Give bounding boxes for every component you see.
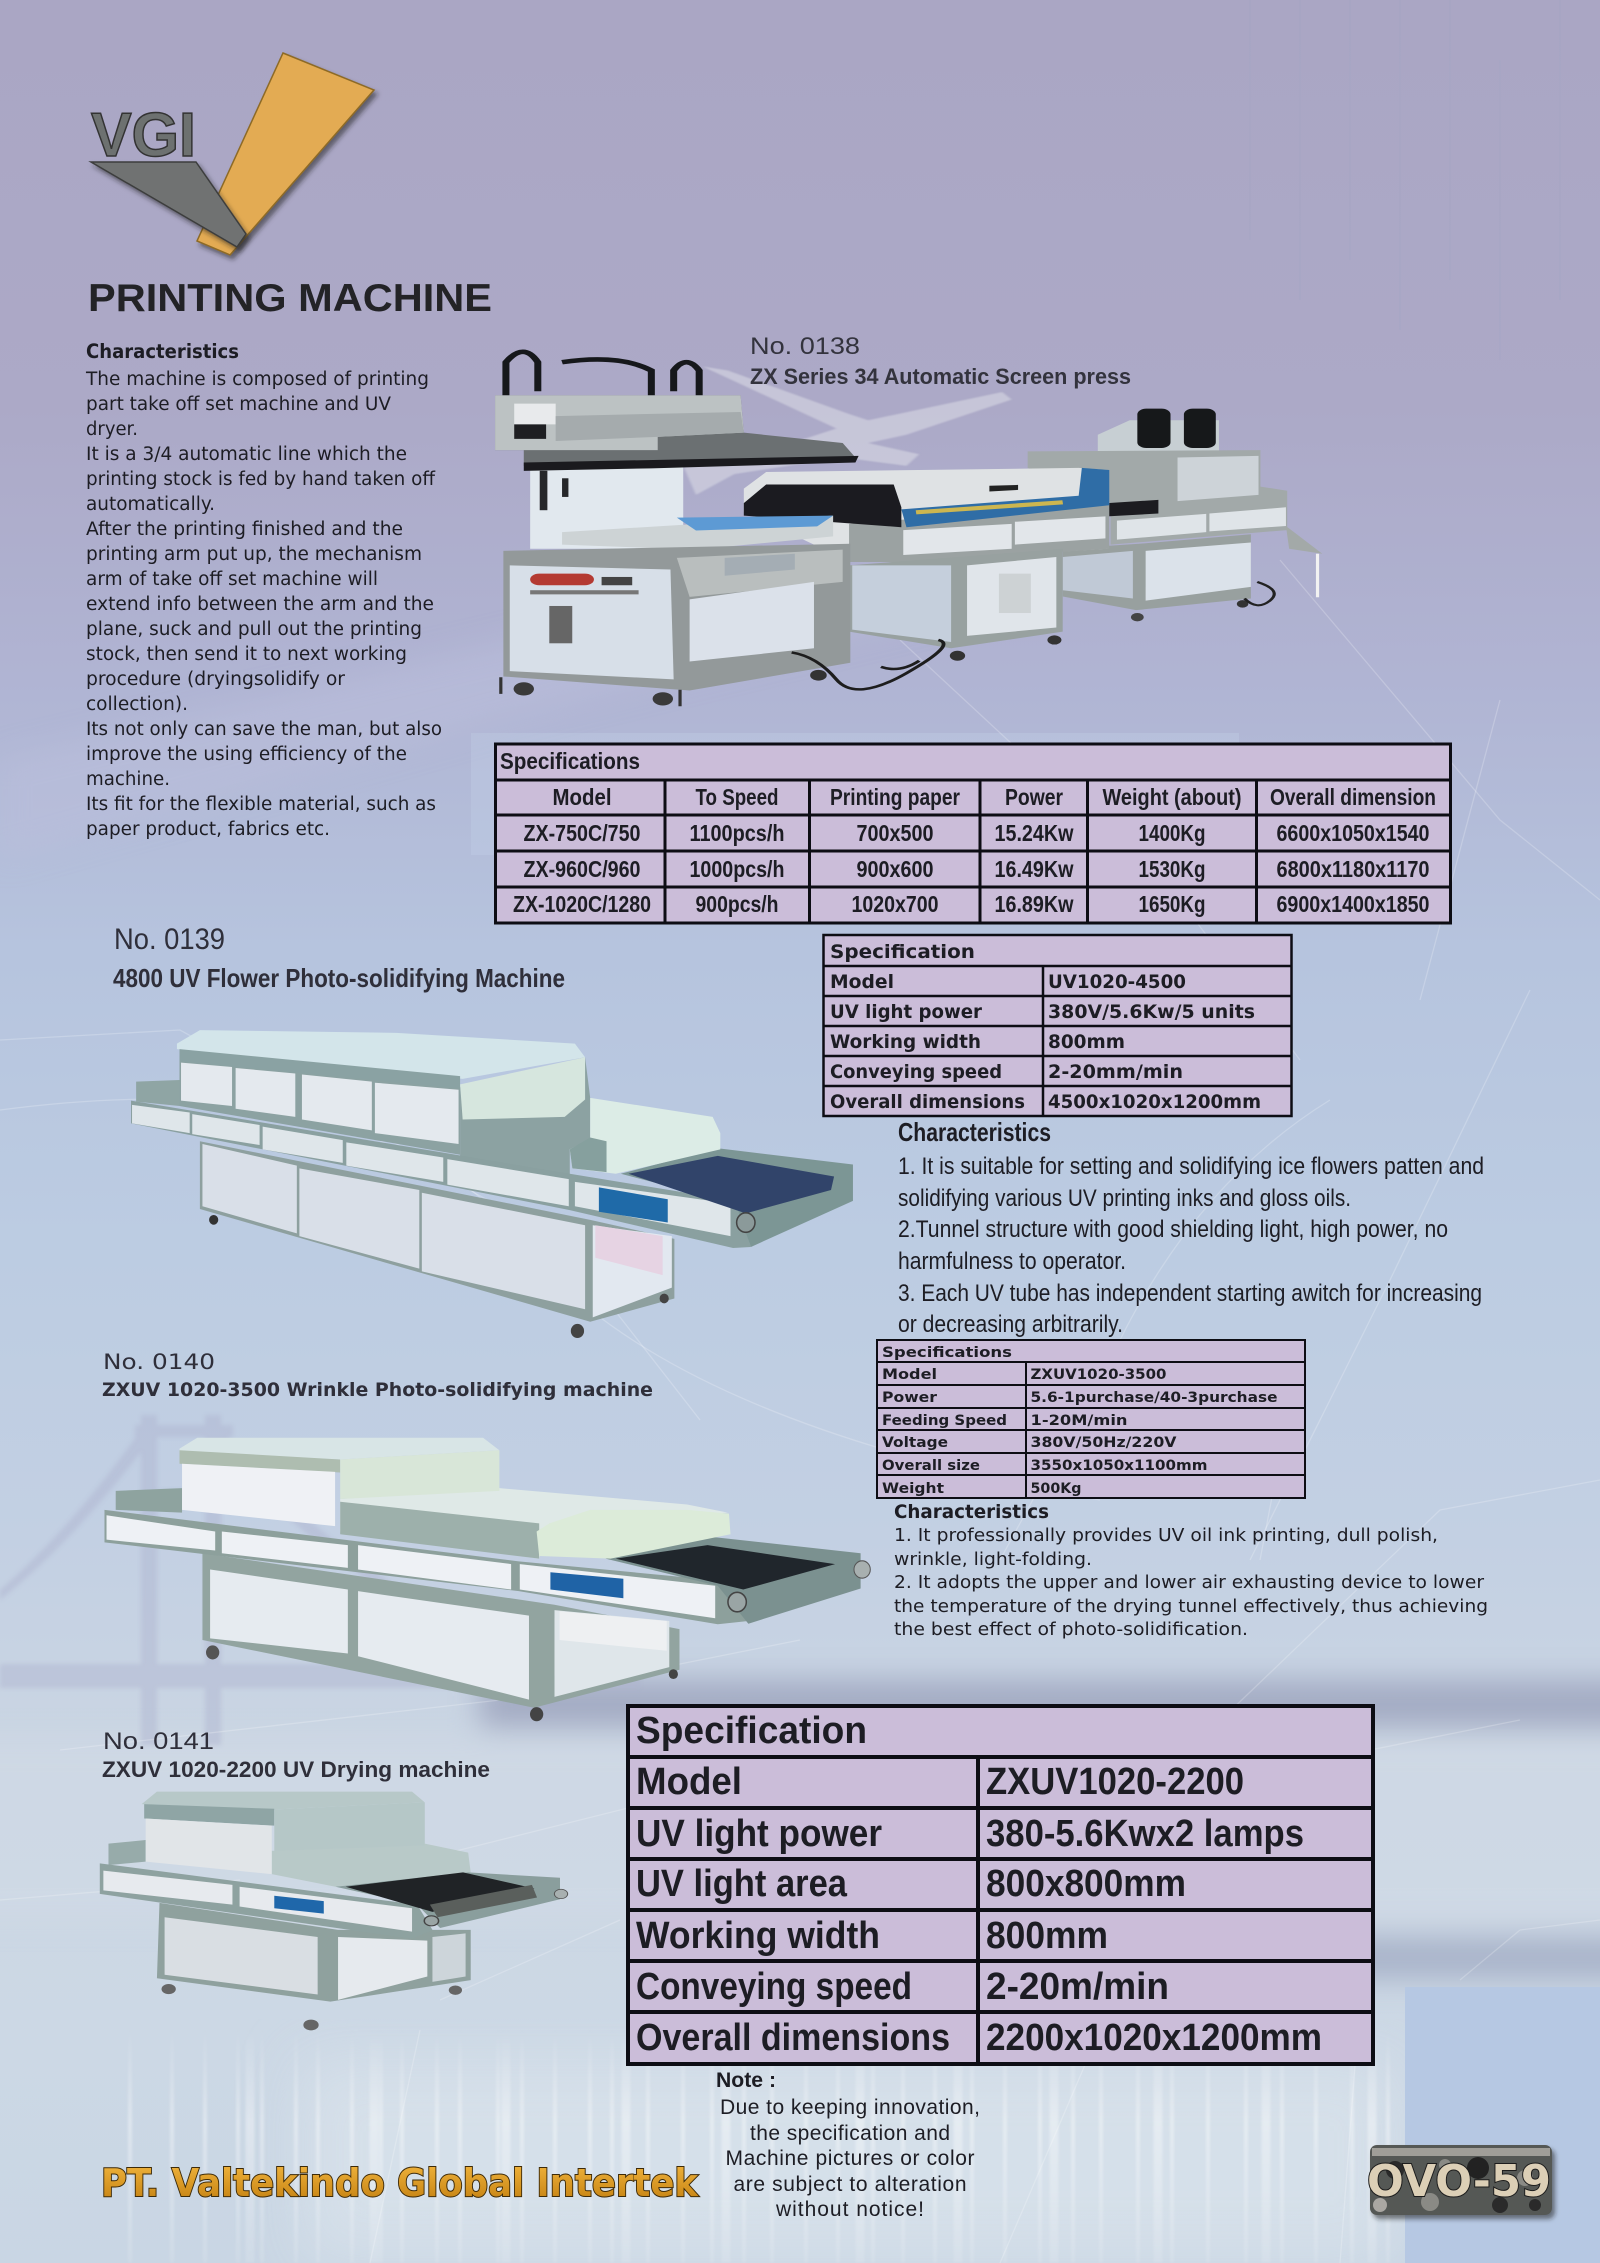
table: ZX series specifications: Model	[552, 784, 612, 810]
tunnel roof and drawers	[136, 1030, 590, 1176]
text block: note: the specification and	[750, 2122, 950, 2145]
table: ZX series specifications: Specifications	[500, 748, 640, 774]
press column and print table	[530, 449, 833, 550]
table: ZXUV1020-2200 specification: Overall dimensions	[636, 2017, 950, 2059]
text block: characteristics intro: paper product, fabrics etc.	[86, 819, 330, 840]
text block: 0140 characteristics: wrinkle, light-folding.	[894, 1550, 1092, 1570]
table: UV1020-4500 specification: 4500x1020x1200mm	[1048, 1091, 1261, 1113]
table: ZXUV1020-2200 specification: Conveying speed	[636, 1966, 912, 2008]
tunnel top	[116, 1438, 728, 1559]
text block: characteristics intro: part take off set machine and UV	[86, 394, 391, 415]
table: UV1020-4500 specification: 800mm	[1048, 1031, 1125, 1053]
table: UV1020-4500 specification: 2-20mm/min	[1048, 1061, 1183, 1083]
side rail	[100, 1863, 432, 1939]
table: ZXUV1020-3500 specifications: Model	[882, 1367, 937, 1383]
machine 0138 image: automatic screen press	[495, 352, 1322, 706]
table: ZXUV1020-3500 specifications: Specifications	[882, 1345, 1012, 1361]
machine heading: No. 0139	[113, 923, 565, 993]
airplane behind machine 0138	[683, 366, 1012, 495]
text block: characteristics intro: extend info between the arm and the	[86, 594, 434, 615]
table: ZXUV1020-3500 specifications: 500Kg	[1030, 1481, 1082, 1497]
machine name: ZXUV 1020-2200 UV Drying machine	[102, 1757, 490, 1782]
long side rail	[104, 1510, 748, 1624]
conveyor belt	[336, 1872, 568, 1928]
heading: characteristics: Characteristics	[86, 340, 239, 363]
table: ZX series specifications: Printing paper	[830, 784, 960, 810]
cabinet below tunnel	[202, 1553, 679, 1721]
text block: characteristics intro: The machine is composed of printing	[85, 369, 429, 390]
table: ZXUV1020-2200 specification: 800mm	[986, 1915, 1108, 1957]
table: UV1020-4500 specification: Model	[830, 971, 894, 993]
table: ZXUV1020-3500 specifications: Voltage	[882, 1435, 948, 1451]
text block: characteristics intro: automatically.	[86, 494, 215, 515]
table: ZXUV1020-2200 specification: Working width	[636, 1915, 880, 1957]
press base cabinet	[501, 544, 944, 706]
table: ZX series specifications: 6900x1400x1850	[1276, 891, 1430, 917]
machine name: ZXUV 1020-3500 Wrinkle Photo-solidifying machine	[102, 1379, 653, 1401]
text block: 0139 characteristics: 3. Each UV tube has independent starting awitch for increasing	[898, 1280, 1482, 1307]
text block: note: Due to keeping innovation,	[720, 2096, 980, 2119]
text block: characteristics intro: dryer.	[86, 419, 138, 440]
machine heading: No. 0140: No. 0140	[103, 1350, 215, 1374]
title: PRINTING MACHINE	[88, 277, 492, 320]
table: ZX series specifications: 16.89Kw	[994, 891, 1074, 917]
text block: 0139 characteristics: harmfulness to operator.	[898, 1248, 1126, 1275]
table: ZX series specifications: To Speed	[696, 784, 778, 810]
text block: note: without notice!	[775, 2198, 924, 2221]
badge label: OVO-59	[1367, 2156, 1551, 2207]
text block: characteristics intro: machine.	[86, 769, 170, 790]
conveyor belt	[606, 1537, 870, 1624]
table: ZXUV1020-3500 specifications: ZXUV1020-3500	[1030, 1367, 1166, 1383]
table: ZXUV1020-3500 specifications: Feeding Speed	[882, 1413, 1007, 1429]
machine 0139 image: UV flower tunnel	[131, 1030, 853, 1338]
cabinet below tunnel	[200, 1141, 674, 1338]
table: UV1020-4500 specification: UV light power	[830, 1001, 983, 1023]
table: ZX series specifications: 1000pcs/h	[690, 856, 784, 882]
table: ZX series specifications: 1100pcs/h	[690, 820, 784, 846]
badge: OVO-59 stone plate	[1367, 2145, 1552, 2215]
text block: characteristics intro: After the printing finished and the	[86, 519, 403, 540]
text block: characteristics intro: stock, then send it to next working	[86, 644, 407, 665]
table: ZXUV1020-2200 specification: 380-5.6Kwx2 lamps	[986, 1813, 1304, 1855]
table: ZXUV1020-2200 specification: Model	[636, 1761, 742, 1803]
table: ZX series specifications: ZX-960C/960	[524, 856, 640, 882]
text block: characteristics intro: It is a 3/4 automatic line which the	[86, 444, 407, 465]
table: ZXUV1020-2200 specification: UV light power	[636, 1813, 882, 1855]
text block: 0139 characteristics: 2.Tunnel structure with good shielding light, high power, no	[898, 1216, 1448, 1243]
table: ZX series specifications: 700x500	[856, 820, 934, 846]
table: ZXUV1020-2200 specification: ZXUV1020-2200	[986, 1761, 1244, 1803]
cabinet	[157, 1903, 471, 2030]
machine heading: No. 0140	[102, 1350, 653, 1401]
company name: PT. Valtekindo Global Intertek	[101, 2161, 699, 2205]
text block: characteristics intro: collection).	[86, 694, 188, 715]
text block: characteristics intro: printing arm put up, the mechanism	[86, 544, 422, 565]
bottom right flat blue panel	[1405, 1987, 1600, 2263]
table: ZX series specifications: ZX-1020C/1280	[513, 891, 651, 917]
heading: characteristics: Characteristics	[894, 1501, 1049, 1523]
table: ZX series specifications: Overall dimension	[1270, 784, 1436, 810]
table: UV1020-4500 specification: Working width	[830, 1031, 981, 1053]
logo: VGI	[91, 53, 374, 255]
table: ZX series specifications: 1650Kg	[1138, 891, 1206, 917]
table: UV1020-4500 specification: Overall dimensions	[830, 1091, 1025, 1113]
text block: characteristics intro	[85, 340, 442, 840]
table: ZXUV1020-3500 specifications: Overall size	[882, 1458, 980, 1474]
text block: characteristics intro: procedure (dryingsolidify or	[86, 669, 345, 690]
press arm head with hoses	[495, 352, 859, 510]
text block: 0139 characteristics: or decreasing arbitrarily.	[898, 1311, 1123, 1338]
table: ZX series specifications: 15.24Kw	[994, 820, 1074, 846]
text block: 0140 characteristics	[894, 1501, 1488, 1640]
machine heading: No. 0139: No. 0139	[114, 923, 225, 956]
text block: characteristics intro: plane, suck and pull out the printing	[86, 619, 422, 640]
table: UV1020-4500 specification	[824, 935, 1292, 1116]
text block: characteristics intro: Its not only can save the man, but also	[86, 719, 442, 740]
table: ZX series specifications	[496, 744, 1450, 923]
machine 0140 image: wrinkle tunnel	[104, 1438, 870, 1721]
first UV dryer	[744, 468, 1109, 661]
centre hood	[570, 1098, 720, 1174]
table: UV1020-4500 specification: Specification	[830, 941, 975, 963]
table: ZXUV1020-3500 specifications: Weight	[882, 1481, 944, 1497]
table: ZX series specifications: 1400Kg	[1138, 820, 1206, 846]
conveyor belt	[621, 1148, 853, 1247]
table: UV1020-4500 specification: UV1020-4500	[1048, 971, 1186, 993]
text block: note: Machine pictures or color	[726, 2147, 974, 2170]
table: UV1020-4500 specification: Conveying speed	[830, 1061, 1002, 1083]
text block: characteristics intro: Its fit for the flexible material, such as	[86, 794, 436, 815]
machine 0141 image: UV drying machine	[100, 1792, 568, 2030]
table: ZX series specifications: 6800x1180x1170	[1276, 856, 1430, 882]
text block: characteristics intro: arm of take off set machine will	[86, 569, 378, 590]
table: ZX series specifications: 1530Kg	[1138, 856, 1206, 882]
note heading: Note :	[716, 2069, 776, 2092]
table: ZXUV1020-3500 specifications: 1-20M/min	[1030, 1413, 1128, 1429]
tunnel top	[108, 1792, 471, 1887]
logo letters: VGI	[91, 101, 196, 170]
table: ZX series specifications: 1020x700	[852, 891, 938, 917]
table: ZXUV1020-3500 specifications: 380V/50Hz/220V	[1030, 1435, 1177, 1451]
table: ZXUV1020-3500 specifications	[877, 1340, 1305, 1498]
table: ZX series specifications: 16.49Kw	[994, 856, 1074, 882]
table: ZX series specifications: ZX-750C/750	[524, 820, 640, 846]
table: ZXUV1020-2200 specification: UV light area	[636, 1863, 848, 1905]
front hood	[537, 1510, 731, 1559]
text block: note: are subject to alteration	[734, 2173, 966, 2196]
text block: 0139 characteristics	[898, 1117, 1484, 1338]
table: ZX series specifications: Power	[1005, 784, 1063, 810]
machine heading: No. 0141: No. 0141	[103, 1728, 214, 1755]
text block: characteristics intro: improve the using efficiency of the	[86, 744, 407, 765]
text block: 0140 characteristics: the temperature of the drying tunnel effectively, thus achieving	[894, 1597, 1488, 1617]
table: ZXUV1020-3500 specifications: 5.6-1purchase/40-3purchase	[1030, 1390, 1278, 1406]
heading: characteristics: Characteristics	[898, 1117, 1051, 1147]
text block: 0139 characteristics: 1. It is suitable for setting and solidifying ice flowers patten and	[898, 1153, 1484, 1180]
text block: 0140 characteristics: the best effect of photo-solidification.	[894, 1620, 1248, 1640]
icon: grey check stroke	[91, 162, 246, 247]
machine heading: No. 0138: No. 0138	[750, 333, 860, 360]
text block: note	[716, 2069, 980, 2221]
table: ZXUV1020-3500 specifications: Power	[882, 1390, 938, 1406]
machine name: 4800 UV Flower Photo-solidifying Machine	[113, 963, 565, 993]
text block: characteristics intro: printing stock is fed by hand taken off	[86, 469, 436, 490]
machine heading: No. 0141	[102, 1728, 490, 1782]
table: ZX series specifications: 6600x1050x1540	[1276, 820, 1430, 846]
machine name: ZX Series 34 Automatic Screen press	[750, 364, 1131, 389]
text block: 0139 characteristics: solidifying various UV printing inks and gloss oils.	[898, 1185, 1351, 1212]
icon: stone plate	[1370, 2145, 1552, 2215]
table: ZXUV1020-2200 specification: 800x800mm	[986, 1863, 1186, 1905]
text block: 0140 characteristics: 1. It professionally provides UV oil ink printing, dull polish,	[894, 1526, 1438, 1546]
table: ZX series specifications: Weight (about)	[1102, 784, 1242, 810]
machine heading: No. 0138	[750, 333, 1131, 389]
table: ZX series specifications: 900x600	[856, 856, 934, 882]
long side rail	[131, 1101, 751, 1248]
table: ZXUV1020-2200 specification	[628, 1706, 1373, 2064]
icon: gold check stroke	[197, 53, 374, 255]
table: ZXUV1020-2200 specification: 2200x1020x1200mm	[986, 2017, 1322, 2059]
second UV dryer	[1028, 409, 1322, 621]
table: UV1020-4500 specification: 380V/5.6Kw/5 units	[1048, 1001, 1255, 1023]
table: ZX series specifications: 900pcs/h	[696, 891, 778, 917]
text block: 0140 characteristics: 2. It adopts the upper and lower air exhausting device to lower	[894, 1573, 1485, 1593]
table: ZXUV1020-2200 specification: 2-20m/min	[986, 1966, 1169, 2008]
table: ZXUV1020-3500 specifications: 3550x1050x1100mm	[1030, 1458, 1208, 1474]
table: ZXUV1020-2200 specification: Specification	[636, 1710, 867, 1752]
